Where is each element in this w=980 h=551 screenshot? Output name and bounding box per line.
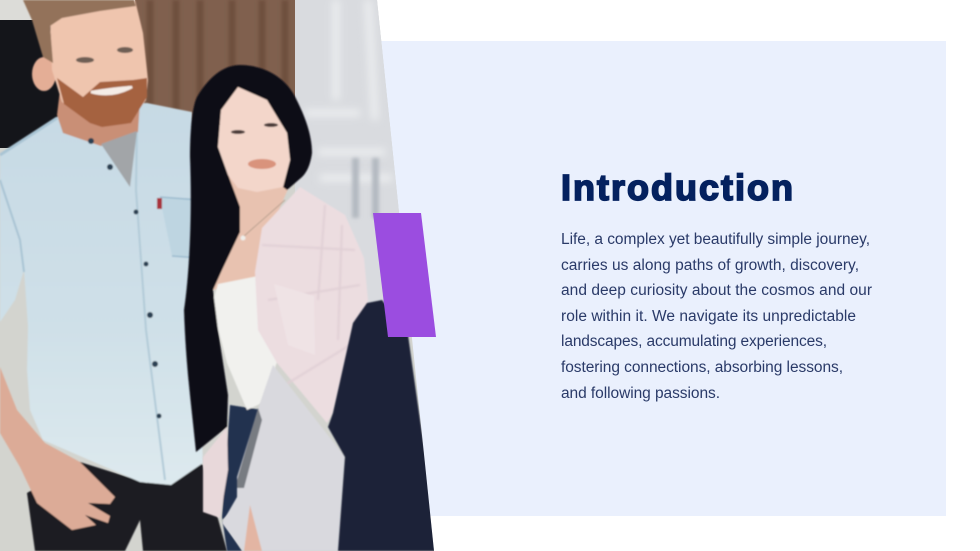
- body paragraph: fostering connections, absorbing lessons,: [561, 359, 843, 376]
- panel: introduction background: [380, 41, 946, 516]
- body paragraph: and deep curiosity about the cosmos and our: [561, 282, 872, 299]
- man: face: [49, 0, 149, 104]
- man: ear: [32, 57, 56, 91]
- man: hair: [23, 0, 136, 63]
- woman: eyes: [231, 123, 278, 134]
- woman: lips: [248, 159, 276, 169]
- body paragraph: carries us along paths of growth, discovery,: [561, 257, 859, 274]
- man: beard: [57, 78, 147, 127]
- body paragraph: [561, 231, 872, 402]
- woman: neck and chest: [212, 175, 292, 290]
- man: [0, 0, 227, 551]
- body paragraph: Life, a complex yet beautifully simple journey,: [561, 231, 870, 248]
- man: shirt: [0, 103, 203, 485]
- photo: couple standing together: [0, 0, 440, 551]
- woman: face: [218, 87, 290, 192]
- body paragraph: role within it. We navigate its unpredictable: [561, 308, 856, 325]
- woman: hair: [184, 65, 312, 452]
- body paragraph: and following passions.: [561, 385, 720, 402]
- man: undershirt: [101, 131, 137, 187]
- body paragraph: landscapes, accumulating experiences,: [561, 333, 827, 350]
- man: arm and hand: [0, 367, 115, 530]
- woman: necklace: [243, 200, 285, 237]
- purple accent shape: [373, 213, 436, 337]
- text block: introduction: [561, 167, 872, 402]
- photo background: room: [0, 0, 440, 551]
- woman: jeans: [222, 405, 262, 551]
- woman: blouse pocket: [278, 293, 308, 300]
- suit sleeve in foreground: [328, 300, 440, 551]
- man: eyes: [76, 47, 133, 63]
- man: smile: [91, 87, 132, 94]
- woman: top: [212, 276, 277, 410]
- man: buttons: [88, 138, 162, 418]
- man: shirt tag: [157, 198, 162, 209]
- woman: [184, 65, 368, 551]
- man: neck: [57, 90, 140, 146]
- man: trousers: [26, 462, 228, 551]
- woman: blouse: [255, 187, 368, 423]
- heading: Introduction: [561, 167, 793, 208]
- clipboard in foreground: [222, 365, 345, 551]
